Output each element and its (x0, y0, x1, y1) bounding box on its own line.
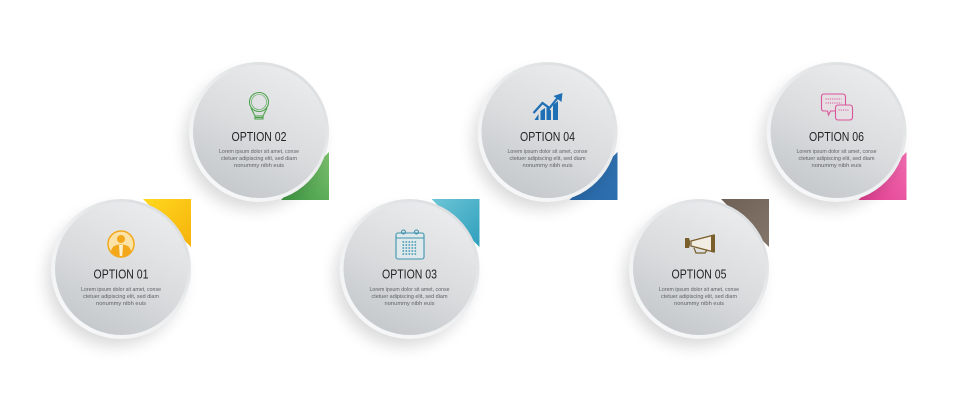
description: nonummy nibh euis (674, 301, 724, 307)
circle rim (340, 199, 480, 339)
circle face (482, 65, 614, 198)
icon: person (108, 231, 134, 257)
accent corner: teal (432, 199, 480, 247)
description: nonummy nibh euis (384, 301, 435, 307)
description: Lorem ipsum dolor sit amet, conse (659, 287, 739, 293)
card: option 05 (625, 199, 769, 346)
description: ctetuer adipiscing elit, sed diam (372, 294, 448, 300)
card: option 06 (762, 62, 906, 209)
heading: OPTION 05 (672, 268, 727, 282)
circle shadow (474, 73, 610, 209)
card: option 01 (47, 199, 191, 346)
icon: megaphone (685, 235, 715, 253)
description: nonummy nibh euis (812, 163, 862, 169)
accent corner: pink (858, 152, 906, 200)
icon: rising chart (534, 93, 562, 120)
description: ctetuer adipiscing elit, sed diam (83, 294, 160, 300)
description: nonummy nibh euis (522, 163, 573, 169)
icon: calendar (396, 230, 424, 259)
heading: OPTION 04 (520, 130, 575, 144)
icon: light bulb (250, 92, 268, 119)
circle rim (478, 62, 618, 202)
accent corner: green (281, 152, 329, 200)
description (219, 149, 299, 169)
heading: OPTION 06 (809, 130, 864, 144)
circle face (55, 202, 188, 335)
circle face (633, 202, 766, 335)
description: Lorem ipsum dolor sit amet, conse (508, 149, 588, 155)
circle rim (629, 199, 769, 339)
description (508, 149, 588, 169)
description: ctetuer adipiscing elit, sed diam (510, 156, 586, 162)
description: Lorem ipsum dolor sit amet, conse (219, 149, 299, 155)
description: Lorem ipsum dolor sit amet, conse (796, 149, 876, 155)
circle face (193, 65, 326, 198)
description: nonummy nibh euis (234, 163, 284, 169)
heading: OPTION 01 (94, 268, 149, 282)
accent corner: blue (570, 152, 618, 200)
description: Lorem ipsum dolor sit amet, conse (370, 287, 450, 293)
card: option 04 (474, 62, 618, 209)
circle rim (189, 62, 329, 202)
circle shadow (625, 210, 761, 346)
accent corner: yellow (143, 199, 191, 247)
circle shadow (336, 210, 472, 346)
description: nonummy nibh euis (96, 301, 146, 307)
circle rim (51, 199, 191, 339)
description: ctetuer adipiscing elit, sed diam (221, 156, 298, 162)
circle shadow (762, 73, 898, 209)
description (81, 287, 161, 307)
circle face (344, 202, 476, 335)
description (659, 287, 739, 307)
circle face (770, 65, 904, 198)
circle shadow (185, 73, 321, 209)
description (370, 287, 450, 307)
icon: speech bubbles (822, 94, 852, 120)
heading: OPTION 02 (232, 130, 287, 144)
card: option 03 (336, 199, 480, 346)
description: ctetuer adipiscing elit, sed diam (798, 156, 875, 162)
description: ctetuer adipiscing elit, sed diam (661, 294, 738, 300)
heading: OPTION 03 (382, 268, 437, 282)
accent corner: brown (721, 199, 769, 247)
description: Lorem ipsum dolor sit amet, conse (81, 287, 161, 293)
card: option 02 (185, 62, 329, 209)
circle shadow (47, 210, 183, 346)
circle rim (766, 62, 906, 202)
description (796, 149, 876, 169)
